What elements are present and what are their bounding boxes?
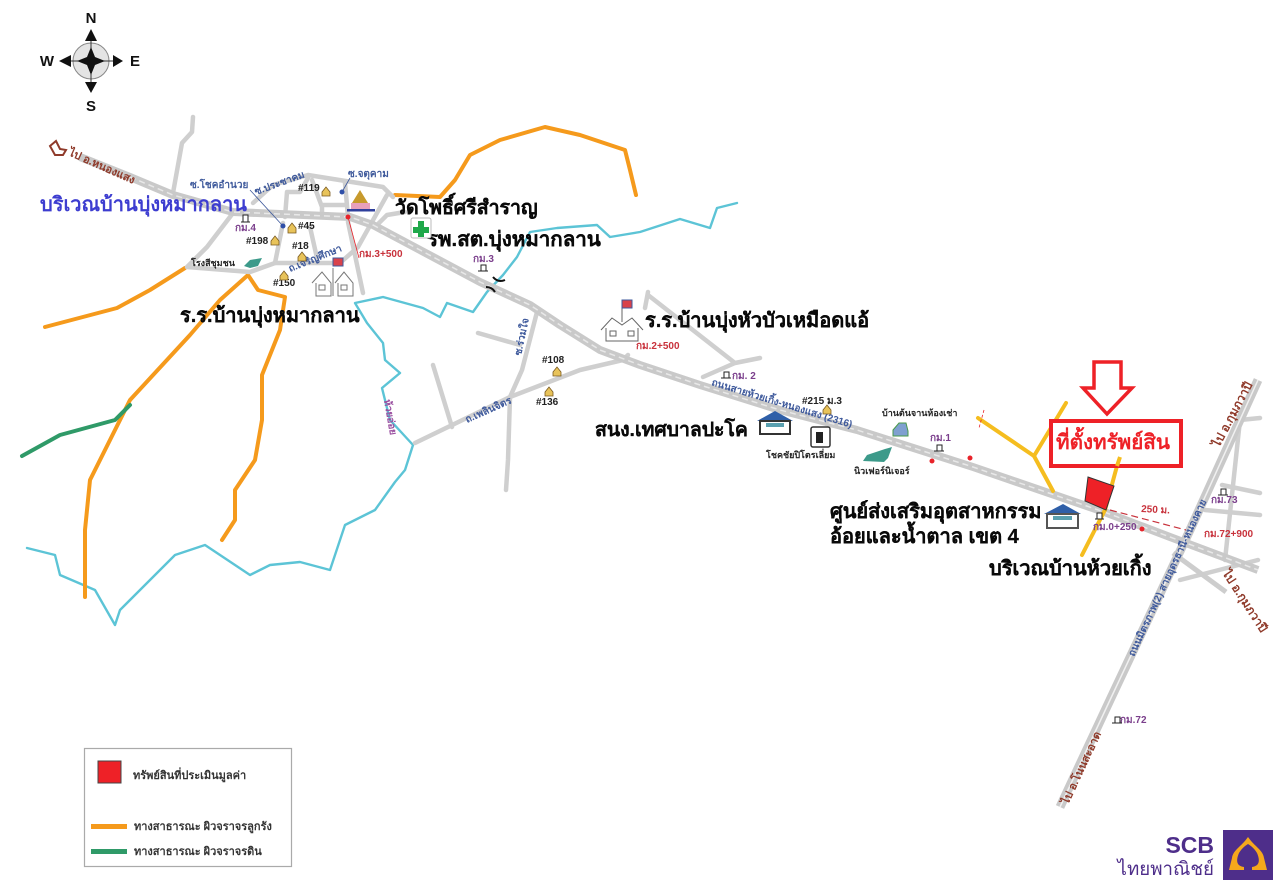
legend: green text: ทางสาธารณะ ผิวจราจรดิน bbox=[134, 845, 262, 858]
heading labels: ร.ร.บ้านบุ่งหมากลาน bbox=[180, 304, 360, 328]
callout: property location bbox=[1051, 421, 1181, 466]
kilometre labels: กม.72 bbox=[1120, 715, 1147, 726]
house number labels: #108 bbox=[542, 355, 565, 366]
icons: km markers bbox=[241, 215, 1228, 723]
red and blue location dots bbox=[280, 190, 1144, 532]
kilometre labels: กม.3 bbox=[473, 254, 494, 265]
heading labels: บริเวณบ้านบุ่งหมากลาน bbox=[40, 193, 247, 217]
kilometre labels: กม.2+500 bbox=[636, 341, 680, 352]
heading labels: สนง.เทศบาลปะโค bbox=[595, 418, 748, 441]
yellow access roads bbox=[978, 403, 1120, 555]
house number labels: #150 bbox=[273, 278, 296, 289]
kilometre labels: กม.73 bbox=[1211, 495, 1238, 506]
icon: school Ban Bung Hua Bua bbox=[601, 300, 643, 341]
icon: rental rooms bbox=[893, 423, 908, 436]
heading labels: อ้อยและน้ำตาล เขต 4 bbox=[830, 521, 1020, 548]
road and place small labels bbox=[50, 141, 1271, 808]
distance line bbox=[1110, 504, 1186, 530]
icon: rice mill bbox=[244, 258, 262, 268]
legend: property swatch bbox=[98, 761, 121, 783]
heading labels bbox=[40, 193, 1152, 580]
logo: SCB: SCB bbox=[1165, 832, 1214, 858]
kilometre labels: กม.0+250 bbox=[1093, 522, 1137, 533]
road and place small labels: ไป อ.กุมภวาปี bbox=[1207, 379, 1256, 452]
compass: E bbox=[130, 53, 140, 70]
icon: municipal office bbox=[757, 411, 793, 434]
house number labels: #198 bbox=[246, 236, 269, 247]
heading labels: ร.ร.บ้านบุ่งหัวบัวเหมือดแอ้ bbox=[645, 309, 869, 333]
green dirt road bbox=[22, 405, 130, 456]
road and place small labels: ห้วยอ่อย bbox=[381, 398, 399, 436]
road and place small labels: ถ.เจริญศึกษา bbox=[287, 242, 344, 275]
house number labels: #119 bbox=[298, 183, 320, 194]
orange laterite roads bbox=[45, 127, 636, 597]
road and place small labels: ไป อ.โนนสะอาด bbox=[1057, 729, 1104, 808]
grey local roads bbox=[173, 117, 1260, 580]
road and place small labels: นิวเฟอร์นิเจอร์ bbox=[854, 465, 910, 476]
icon: furniture factory bbox=[863, 447, 892, 462]
road and place small labels: บ้านต้นจานห้องเช่า bbox=[882, 408, 957, 418]
kilometre labels: กม.3+500 bbox=[359, 249, 403, 260]
kilometre labels: กม.72+900 bbox=[1204, 529, 1254, 540]
heading labels: รพ.สต.บุ่งหมากลาน bbox=[427, 228, 601, 252]
icon: hospital cross bbox=[411, 218, 431, 238]
callout: property location: ที่ตั้งทรัพย์สิน bbox=[1056, 426, 1170, 454]
kilometre labels: กม.4 bbox=[235, 223, 256, 234]
main road bbox=[80, 157, 1258, 592]
road and place small labels: โรงสีชุมชน bbox=[190, 257, 236, 269]
legend: green swatch bbox=[91, 849, 127, 854]
kilometre labels bbox=[235, 223, 1254, 726]
legend: orange text: ทางสาธารณะ ผิวจราจรลูกรัง bbox=[134, 820, 272, 834]
road and place small labels: ถนนสายห้วยเกิ้ง-หนองแสง (2316) bbox=[710, 374, 854, 431]
legend: orange swatch bbox=[91, 824, 127, 829]
road and place small labels: ถ.เพลินจิตร bbox=[463, 394, 514, 426]
legend: property text: ทรัพย์สินที่ประเมินมูลค่า bbox=[133, 767, 246, 783]
highway bbox=[1060, 380, 1258, 807]
compass: W bbox=[40, 53, 55, 70]
distance line: 250 ม. bbox=[1141, 504, 1170, 517]
house number labels: #215 ม.3 bbox=[802, 396, 842, 407]
icon: temple bbox=[347, 190, 375, 212]
bridge bbox=[486, 277, 505, 292]
logo: SCB: ไทยพาณิชย์ bbox=[1116, 858, 1214, 879]
icon: industrial promotion centre bbox=[1044, 504, 1081, 528]
house number labels: #18 bbox=[292, 241, 309, 252]
compass: N bbox=[86, 10, 96, 27]
heading labels: ศูนย์ส่งเสริมอุตสาหกรรม bbox=[830, 500, 1041, 525]
house number labels: #136 bbox=[536, 397, 559, 408]
road and place small labels: ซ.ร่วมใจ bbox=[511, 317, 532, 357]
road and place small labels: ไป อ.หนองแสง bbox=[65, 144, 137, 187]
kilometre labels: กม. 2 bbox=[732, 371, 756, 382]
road and place small labels: ถนนมิตรภาพ(2) สายอุดรธานี-หนองคาย bbox=[1126, 497, 1209, 658]
heading labels: วัดโพธิ์ศรีสำราญ bbox=[395, 193, 538, 219]
road and place small labels: โชคชัยปิโตรเลี่ยม bbox=[765, 448, 835, 460]
road and place small labels: ซ.จตุคาม bbox=[348, 169, 389, 180]
heading labels: บริเวณบ้านห้วยเกิ้ง bbox=[989, 553, 1152, 580]
logo: SCB bbox=[1116, 830, 1273, 880]
compass: S bbox=[86, 98, 96, 115]
house number labels: #45 bbox=[298, 221, 315, 232]
panel: legend bbox=[84, 748, 292, 866]
arrow bbox=[1083, 362, 1132, 414]
icon: house markers bbox=[271, 187, 831, 414]
icon: petrol station bbox=[811, 427, 830, 447]
icon: school Ban Bung Mak Lan bbox=[312, 258, 353, 296]
compass bbox=[40, 10, 140, 115]
house number labels bbox=[246, 183, 842, 408]
kilometre labels: กม.1 bbox=[930, 433, 951, 444]
road and place small labels: ซ.โชคอำนวย bbox=[190, 178, 248, 191]
road and place small labels: ซ.ประชาคม bbox=[253, 169, 306, 198]
road and place small labels: ไป อ.กุมภวาปี bbox=[1218, 565, 1271, 636]
river bbox=[27, 203, 737, 625]
property marker bbox=[1085, 477, 1114, 510]
